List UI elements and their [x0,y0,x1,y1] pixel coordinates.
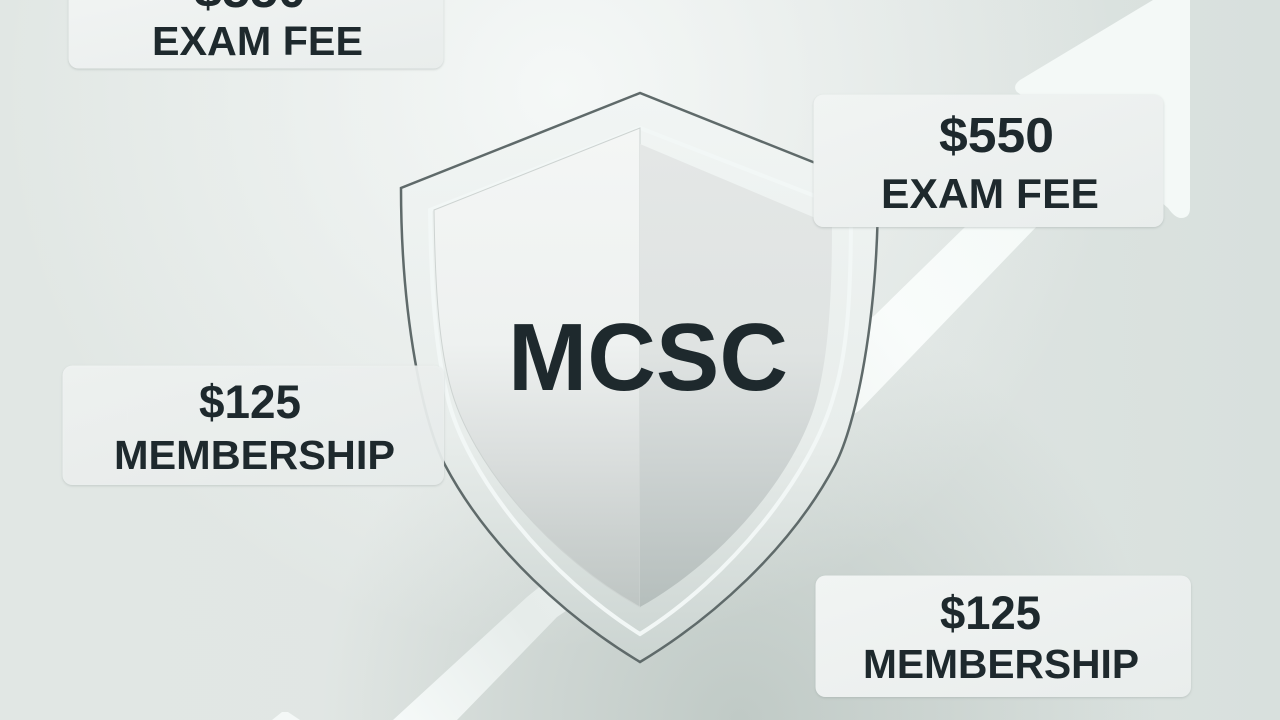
amount: $125 [940,586,1041,639]
label: EXAM FEE [881,170,1099,217]
card: left membership [62,366,444,485]
shield right face [640,144,832,607]
shield label: MCSC [508,304,788,411]
card: top-left exam fee [68,0,444,68]
amount: $550 [939,109,1054,163]
amount: $125 [199,375,301,428]
shield [401,93,878,662]
shield left face [434,128,640,607]
shield inner bevel line [430,128,851,634]
label: MEMBERSHIP [863,641,1139,687]
arrow: rising growth arrow behind the shield [272,0,1190,720]
shield outer rim [401,93,878,662]
card: bottom-right membership [816,576,1191,697]
label: EXAM FEE [152,18,363,64]
label: MEMBERSHIP [114,432,395,478]
card: right exam fee [814,94,1164,227]
